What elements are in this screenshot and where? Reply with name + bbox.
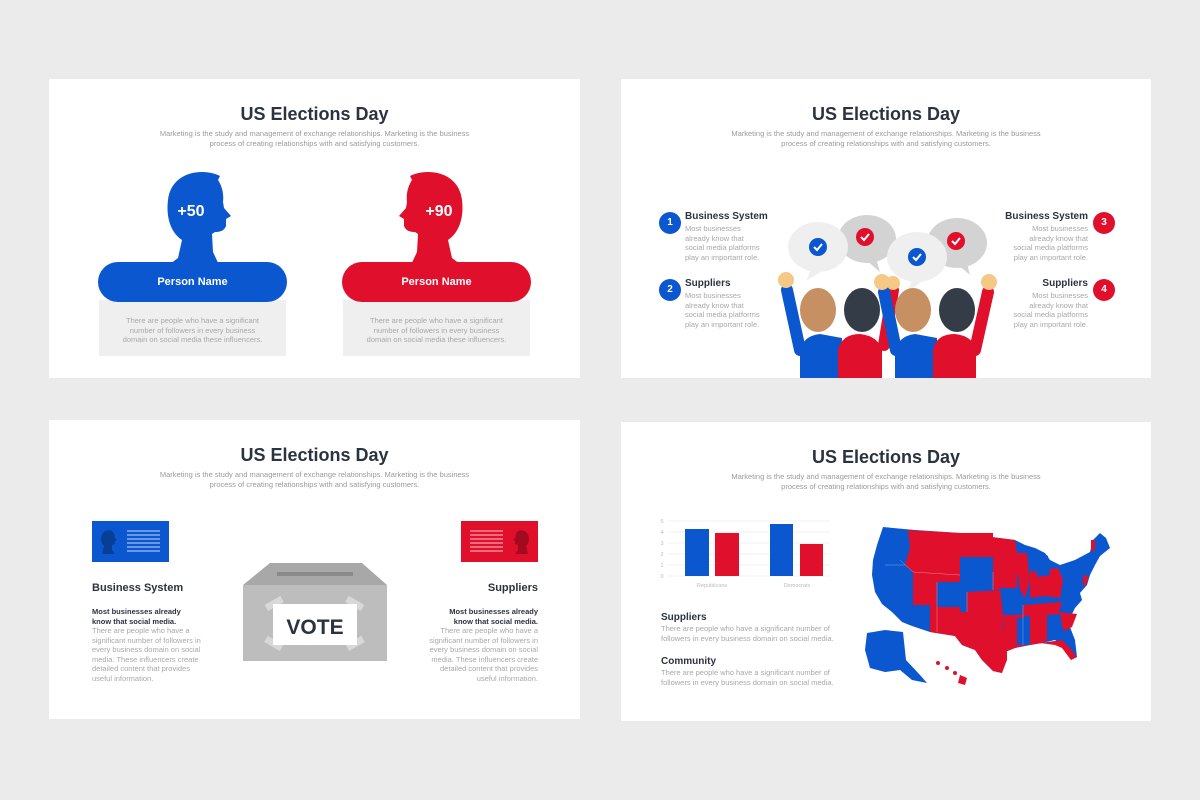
people [778, 272, 997, 378]
subtitle [160, 129, 469, 148]
text: Business System: useful information. [92, 674, 153, 682]
text: Community: followers in every business domain on social media. [661, 678, 834, 686]
slide 4: chart and map [621, 422, 1151, 721]
title: US Elections Day [240, 445, 389, 465]
slide 1: person cards [49, 79, 580, 378]
item 2: already know that [685, 300, 744, 310]
text: Business System: media. These influencers create [92, 654, 199, 664]
text box: There are people who have a significant [126, 316, 259, 325]
item 3: Business System [1005, 211, 1088, 222]
number: +50: +50 [177, 203, 205, 220]
item 2: 2 [667, 284, 673, 295]
item 1: Business System [685, 211, 768, 222]
bar chart: 0 [660, 574, 664, 580]
text box: There are people who have a significant [370, 316, 503, 325]
item 1: 1 [667, 217, 673, 228]
ballot box [243, 563, 387, 661]
item 2 [659, 278, 760, 328]
item 4: social media platforms [1013, 310, 1088, 319]
pill: Person Name: Person Name [157, 276, 228, 288]
text: Suppliers: significant number of followers in [429, 636, 538, 644]
item 4: 4 [1101, 284, 1107, 295]
ballot box: VOTE [286, 616, 344, 639]
item 2: play an important role. [685, 320, 759, 328]
text box [99, 300, 286, 356]
item 3: Most businesses [1032, 224, 1088, 233]
text: Community [661, 656, 834, 686]
text box: domain on social media these influencers. [123, 335, 262, 344]
text: Business System: Most businesses already [92, 607, 181, 616]
text box: number of followers in every business [374, 326, 499, 334]
slide 2: voters [621, 79, 1151, 378]
title: US Elections Day [812, 447, 960, 467]
item 2: Most businesses [685, 291, 741, 300]
subtitle: process of creating relationships with and satisfying customers. [781, 138, 991, 148]
item 1: social media platforms [685, 243, 760, 252]
bar chart [660, 519, 830, 589]
item 2: Suppliers [685, 278, 731, 289]
bar chart: 1 [660, 563, 664, 569]
item 4 [1013, 278, 1115, 328]
pill: Person Name [342, 262, 531, 302]
subtitle: process of creating relationships with and satisfying customers. [781, 482, 991, 490]
US map [865, 527, 1110, 685]
item 4: already know that [1029, 300, 1088, 310]
card: red person [342, 172, 531, 356]
subtitle [731, 129, 1041, 148]
icon: red head silhouette [399, 172, 462, 262]
text: Suppliers: media. These influencers create [431, 654, 538, 664]
text: Community: There are people who have a significant number of [661, 668, 830, 677]
subtitle: Marketing is the study and management of exchange relationships. Marketing is the business [160, 470, 469, 479]
text: Business System: Business System [92, 582, 183, 594]
text: Community: Community [661, 656, 716, 667]
pill: Person Name: Person Name [401, 276, 472, 288]
text box: number of followers in every business [130, 326, 255, 334]
title: US Elections Day [240, 104, 389, 124]
item 3 [1005, 211, 1115, 262]
text: Suppliers [661, 612, 834, 642]
item 1: play an important role. [685, 252, 759, 262]
text: Suppliers: every business domain on social [430, 645, 538, 654]
subtitle: process of creating relationships with and satisfying customers. [210, 138, 419, 148]
bar chart: 5 [660, 519, 664, 525]
item 3: already know that [1029, 234, 1088, 242]
text: Business System: know that social media. [92, 616, 176, 626]
item 4: Suppliers [1042, 278, 1088, 289]
item 3: 3 [1101, 217, 1107, 228]
title: US Elections Day [812, 104, 960, 124]
text: Suppliers: know that social media. [454, 616, 538, 626]
text: Suppliers: followers in every business domain on social media. [661, 634, 834, 642]
item 4: play an important role. [1014, 320, 1088, 328]
icon: blue ballot card [92, 521, 169, 562]
text: Suppliers: useful information. [477, 674, 538, 682]
subtitle: Marketing is the study and management of exchange relationships. Marketing is the business [731, 472, 1041, 481]
card: blue person [98, 172, 287, 356]
text box [343, 300, 530, 356]
item 1 [659, 211, 768, 262]
item 3: play an important role. [1014, 252, 1088, 262]
text: Business System [92, 582, 201, 682]
icon: blue head silhouette [168, 172, 231, 262]
number: +90: +90 [425, 203, 453, 220]
bar chart: 4 [660, 530, 664, 536]
text: Suppliers: Most businesses already [449, 607, 538, 616]
subtitle [160, 470, 469, 488]
bar chart: Democrats [784, 583, 811, 589]
subtitle: Marketing is the study and management of exchange relationships. Marketing is the business [731, 129, 1041, 138]
text: Business System: significant number of followers in [92, 636, 201, 644]
subtitle: Marketing is the study and management of exchange relationships. Marketing is the business [160, 129, 469, 138]
item 1: already know that [685, 234, 744, 242]
bubbles [788, 215, 987, 292]
text: Suppliers: Suppliers [661, 612, 707, 623]
icon: red ballot card [461, 521, 538, 562]
bar chart: Republicans [697, 583, 727, 589]
item 2: social media platforms [685, 310, 760, 319]
text: Suppliers: Suppliers [488, 582, 538, 594]
item 1: Most businesses [685, 224, 741, 233]
slide 3: vote box [49, 420, 580, 719]
subtitle: process of creating relationships with and satisfying customers. [210, 480, 419, 488]
text: Business System: detailed content that provides [92, 664, 190, 673]
bar chart: 3 [660, 541, 664, 547]
item 4: Most businesses [1032, 291, 1088, 300]
illustration: voters with speech bubbles [778, 215, 997, 378]
subtitle [731, 472, 1041, 490]
text: Business System: There are people who have a [92, 626, 190, 635]
text box: domain on social media these influencers. [367, 335, 506, 344]
text: Suppliers: There are people who have a [440, 626, 538, 635]
item 3: social media platforms [1013, 243, 1088, 252]
text: Business System: every business domain on social [92, 645, 200, 654]
text: Suppliers: detailed content that provides [440, 664, 538, 673]
text: Suppliers: There are people who have a significant number of [661, 624, 830, 633]
bar chart: 2 [660, 552, 664, 558]
pill: Person Name [98, 262, 287, 302]
text: Suppliers [429, 582, 538, 682]
